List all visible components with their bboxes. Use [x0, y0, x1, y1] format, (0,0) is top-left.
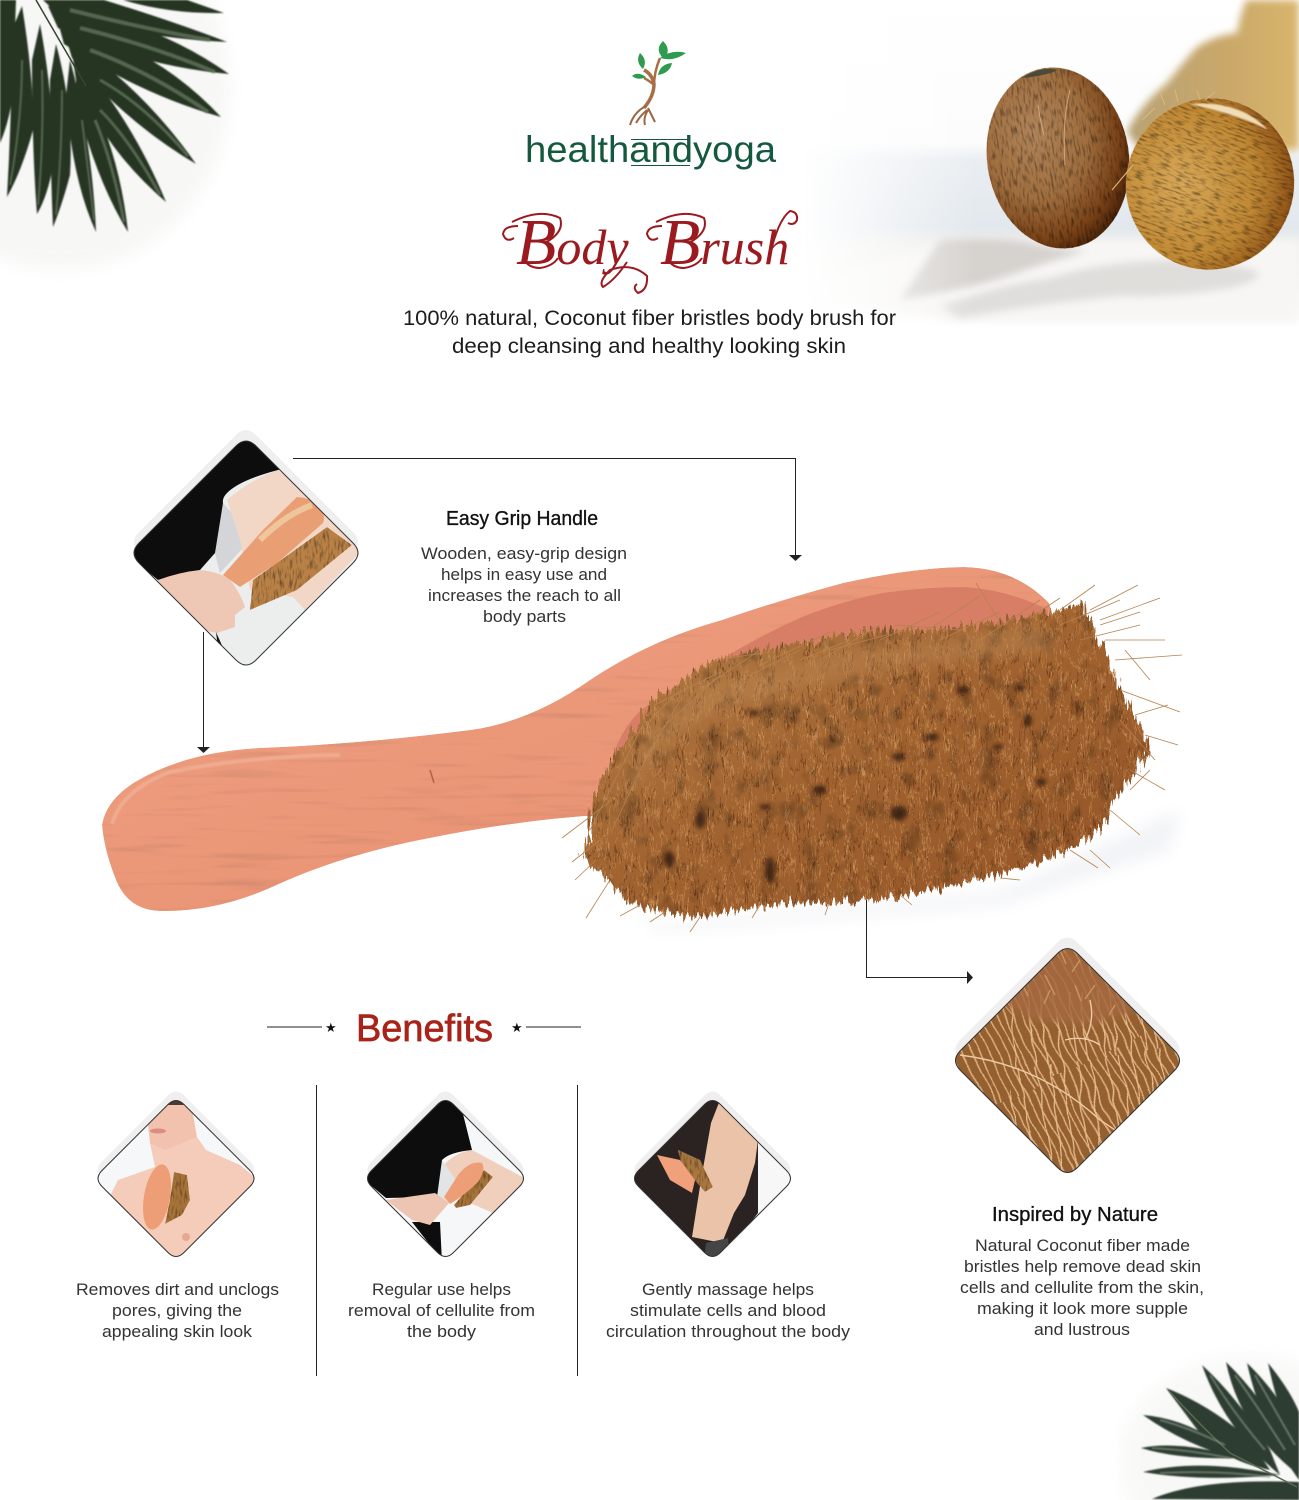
text: easy grip description: helps in easy use and [441, 565, 607, 584]
text: inspired by nature description: making it look more supple [977, 1299, 1188, 1318]
icon: chest brushing diamond [92, 1092, 260, 1262]
text: benefit two: the body [407, 1322, 477, 1341]
top-right beach photo background [851, 0, 1299, 322]
icon: coconut fibre close-up diamond [955, 938, 1180, 1173]
callout arrow: diamond down to handle [197, 632, 210, 753]
text: inspired by nature description: and lustrous [1034, 1320, 1130, 1339]
icon: arm brushing diamond [362, 1092, 530, 1262]
subtitle [403, 307, 896, 358]
text: benefit two: removal of cellulite from [348, 1301, 535, 1320]
coconut right [1102, 74, 1299, 294]
coconut left [974, 57, 1142, 259]
stray fibres [562, 583, 1182, 932]
text: benefit three [606, 1280, 851, 1341]
brush ground shadow [600, 810, 1180, 932]
text: easy grip description: body parts [483, 607, 566, 626]
text: inspired by nature description [960, 1236, 1204, 1339]
dark gaps between tufts [664, 685, 1046, 883]
heading: Benefits [267, 1008, 581, 1050]
subtitle: 100% natural, Coconut fiber bristles body brush for [403, 307, 896, 330]
top-left palm leaf [0, 0, 230, 270]
text: benefit three: Gently massage helps [642, 1280, 814, 1299]
recessed brush head [612, 587, 1048, 790]
heading: Benefits: ★ [325, 1021, 337, 1036]
title: Body Brush [503, 206, 797, 293]
sand dune [810, 240, 1299, 322]
icon: arm being brushed diamond [134, 430, 358, 666]
brush product image [102, 567, 1182, 932]
text: inspired by nature description: Natural Coconut fiber made [975, 1236, 1190, 1255]
text: benefit one: Removes dirt and unclogs [76, 1280, 279, 1299]
heading: Benefits: ★ [511, 1021, 523, 1036]
text: easy grip description: increases the reach to all [428, 586, 621, 605]
brush handle [102, 567, 1060, 911]
logo icon: sapling [630, 41, 686, 125]
text: inspired by nature description: cells and cellulite from the skin, [960, 1278, 1204, 1297]
coconut fibre bristles [584, 603, 1150, 917]
heading: Benefits: Benefits [356, 1008, 493, 1050]
text: easy grip description [421, 544, 627, 626]
text: benefit one [76, 1280, 279, 1341]
subtitle: deep cleansing and healthy looking skin [452, 335, 846, 358]
bottom-right palm leaf [1120, 1355, 1299, 1500]
text: benefit one: pores, giving the [112, 1301, 242, 1320]
dividers between benefits [316, 1085, 578, 1376]
logo: healthandyoga [525, 41, 776, 170]
coconut shadows [900, 238, 1088, 300]
title: Body Brush: Body [516, 206, 629, 279]
callout arrow: handle to top diamond [293, 458, 802, 561]
pale upper fibres [610, 625, 1060, 830]
text: easy grip description: Wooden, easy-grip design [421, 544, 627, 563]
title: Body Brush: Brush [660, 206, 789, 279]
text: benefit two [348, 1280, 535, 1341]
text: benefit one: appealing skin look [102, 1322, 253, 1341]
callout arrow: bristles to nature diamond [866, 900, 973, 984]
text: benefit three: stimulate cells and blood [630, 1301, 826, 1320]
text: benefit three: circulation throughout the body [606, 1322, 851, 1341]
icon: leg brushing diamond [629, 1092, 797, 1262]
logo wordmark: healthandyoga [525, 129, 776, 170]
text: benefit two: Regular use helps [372, 1280, 511, 1299]
rock [1127, 0, 1299, 150]
heading: Easy Grip Handle: Easy Grip Handle [446, 508, 598, 530]
text: inspired by nature description: bristles help remove dead skin [964, 1257, 1201, 1276]
heading: Inspired by Nature: Inspired by Nature [992, 1204, 1158, 1226]
